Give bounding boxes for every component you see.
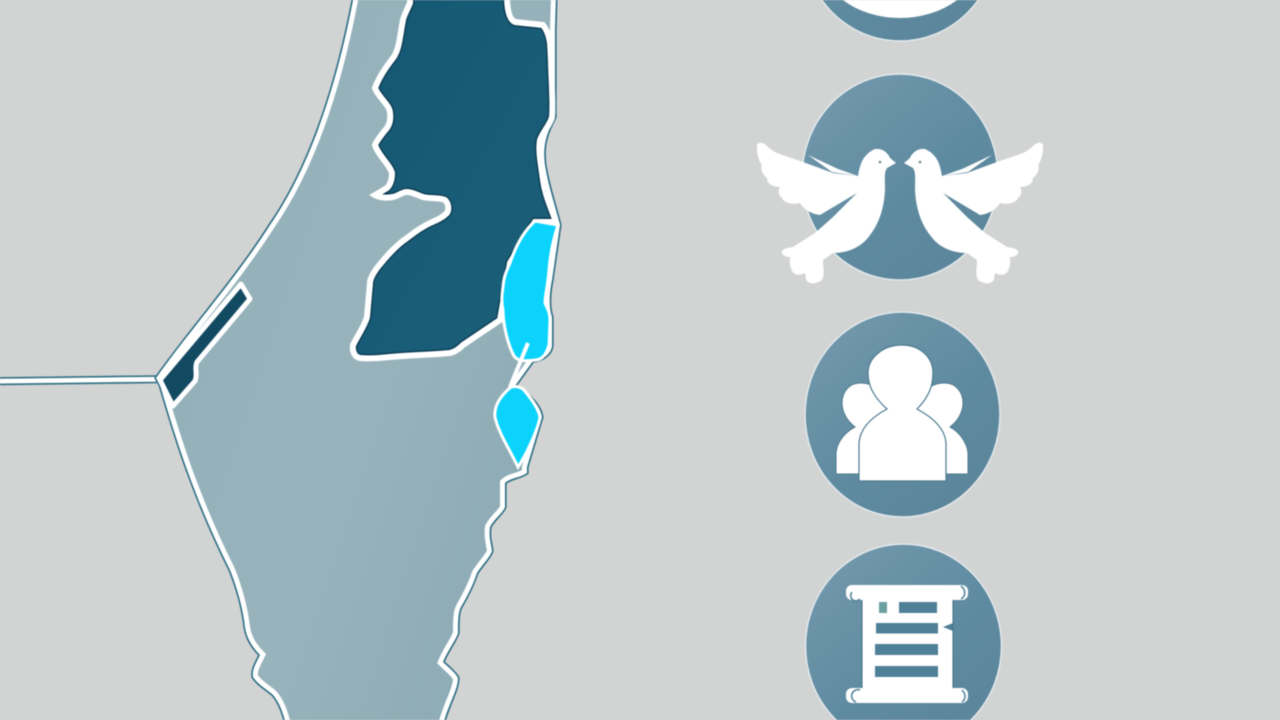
map: lower lake [495, 387, 540, 467]
text lines [875, 602, 953, 677]
scroll paper [862, 596, 953, 690]
icon: scroll document [806, 544, 1002, 720]
scroll top roller [846, 585, 968, 601]
scroll bottom roller [846, 688, 968, 703]
icon: partial circle top [802, 0, 998, 41]
map: channel between lakes [510, 343, 528, 387]
icon: doves [757, 74, 1043, 283]
right dove [904, 143, 1043, 283]
map: dark strip southwest [160, 284, 250, 406]
map: country outline [156, 0, 560, 720]
border line to the west [0, 376, 158, 384]
map: upper lake [502, 221, 558, 361]
icon: people [805, 312, 1000, 517]
map: dark region north [353, 0, 556, 358]
left dove [757, 143, 896, 283]
